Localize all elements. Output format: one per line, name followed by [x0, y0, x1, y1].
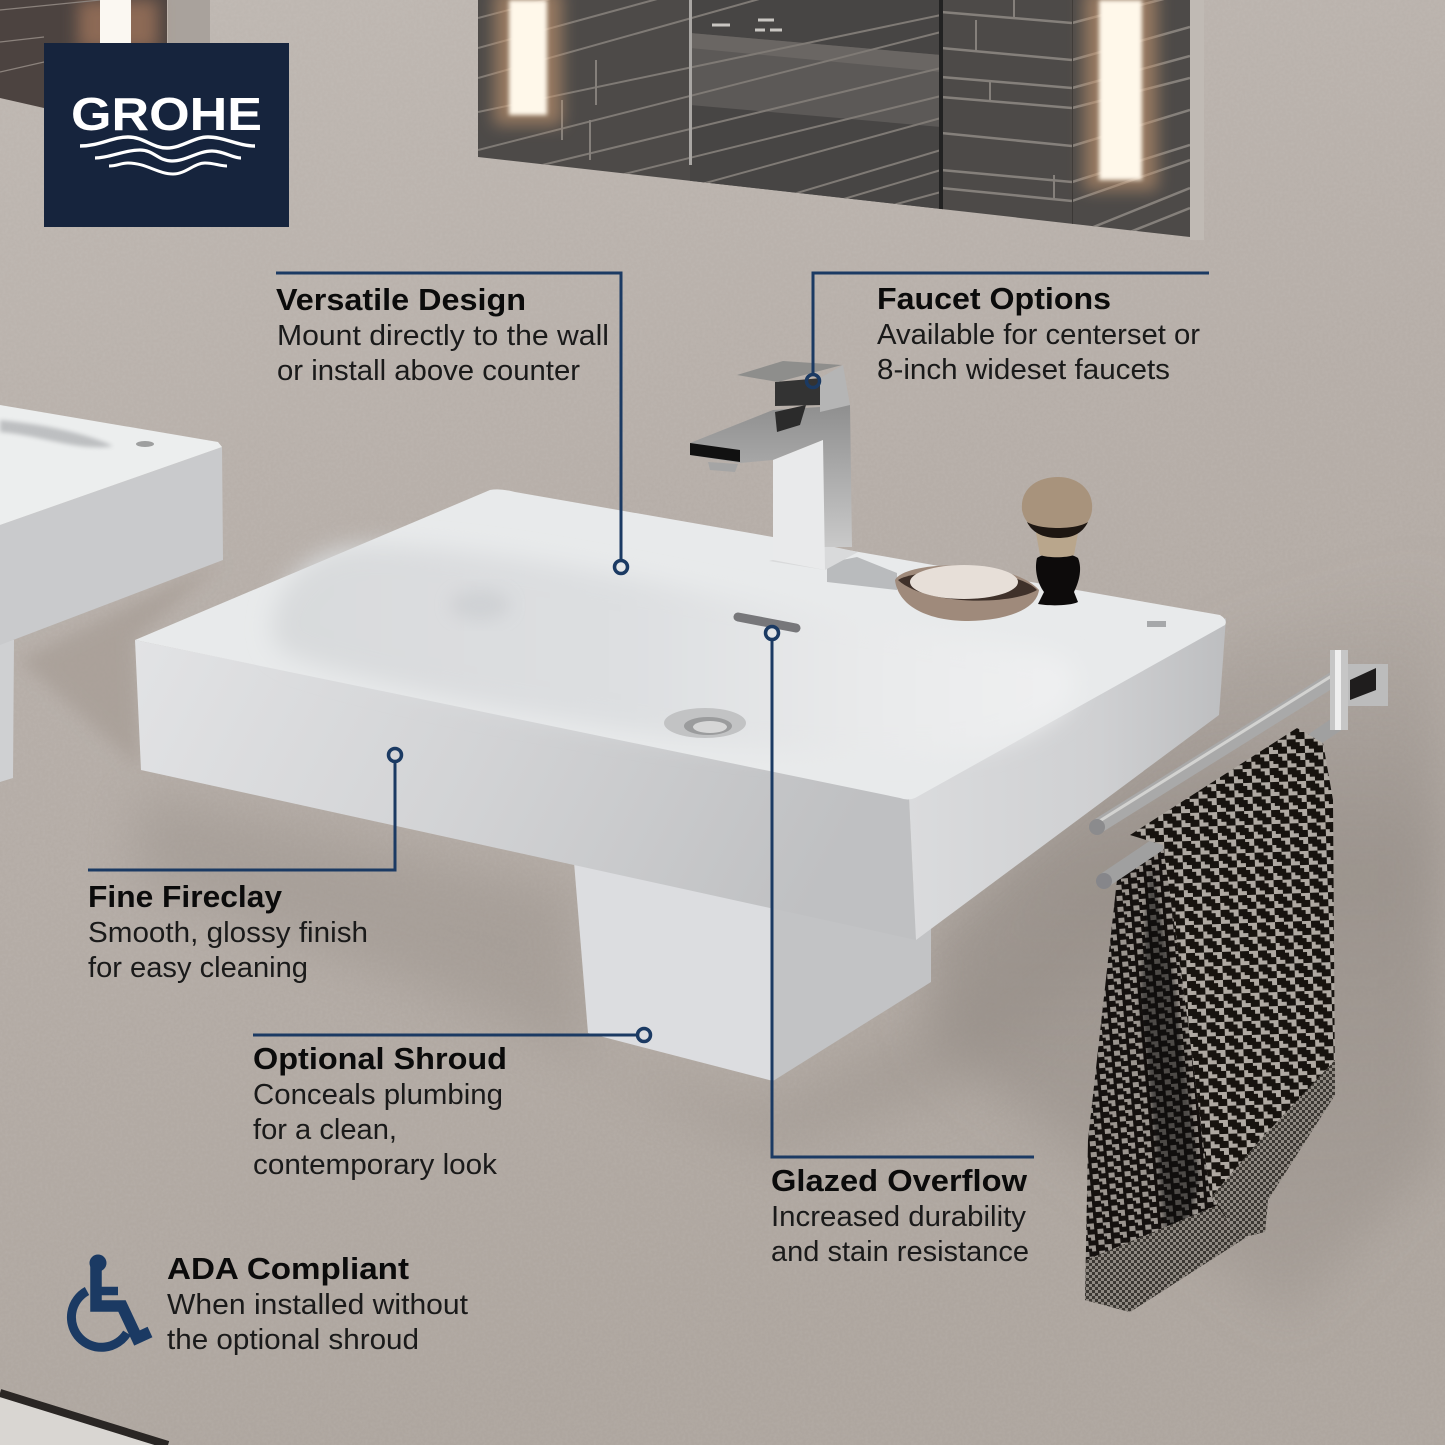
callout: faucet options: [806, 273, 1209, 388]
sink shroud: [573, 850, 931, 1081]
overflow slot: [738, 617, 796, 628]
callout: ADA compliant: the optional shroud: [167, 1324, 419, 1356]
drain: [664, 708, 746, 738]
GROHE logo: GROHE: [71, 88, 262, 140]
towel back panel: [1085, 843, 1245, 1312]
GROHE logo: [44, 43, 289, 227]
callout: faucet options: 8-inch wideset faucets: [877, 354, 1170, 386]
dish: [895, 565, 1039, 621]
logo mark on sink: [1147, 621, 1166, 627]
callout: faucet options: Available for centerset or: [877, 319, 1200, 351]
towel front panel: [1085, 728, 1335, 1312]
callout: optional shroud: [253, 1028, 650, 1181]
callout: glazed overflow: [766, 626, 1034, 1268]
upper towel bar: [1089, 672, 1340, 835]
faucet: [690, 361, 897, 590]
callout: fine fireclay: Smooth, glossy finish: [88, 917, 368, 949]
icon: wheelchair accessibility: [71, 1254, 150, 1347]
callout: versatile design: [276, 273, 628, 574]
lower towel bar: [1096, 650, 1388, 889]
callout: ADA compliant: [167, 1251, 468, 1356]
callout: ADA compliant: When installed without: [167, 1289, 468, 1321]
callout: fine fireclay: Fine Fireclay: [88, 879, 283, 914]
callout: versatile design: Mount directly to the wall: [277, 320, 609, 352]
brush: [1022, 477, 1092, 605]
callout: versatile design: or install above counter: [277, 355, 580, 387]
callout: faucet options: Faucet Options: [877, 281, 1111, 316]
callout: optional shroud: for a clean,: [253, 1114, 397, 1146]
callout: glazed overflow: Glazed Overflow: [771, 1163, 1028, 1198]
callout: optional shroud: Optional Shroud: [253, 1041, 507, 1076]
callout: glazed overflow: Increased durability: [771, 1201, 1026, 1233]
callout: fine fireclay: for easy cleaning: [88, 952, 308, 984]
callout: ADA compliant: ADA Compliant: [167, 1251, 409, 1286]
callout: fine fireclay: [88, 748, 402, 984]
soap dish and shaving brush: [895, 477, 1092, 621]
left mirror: [0, 0, 210, 120]
callout: optional shroud: contemporary look: [253, 1149, 498, 1181]
sink basin: [135, 489, 1226, 940]
callout: glazed overflow: and stain resistance: [771, 1236, 1029, 1268]
callout: optional shroud: Conceals plumbing: [253, 1079, 503, 1111]
left neighbouring sink: [0, 405, 223, 782]
basin bowl: [273, 546, 1075, 754]
callout: versatile design: Versatile Design: [276, 282, 526, 317]
wall mirror with lights: [478, 0, 1190, 240]
